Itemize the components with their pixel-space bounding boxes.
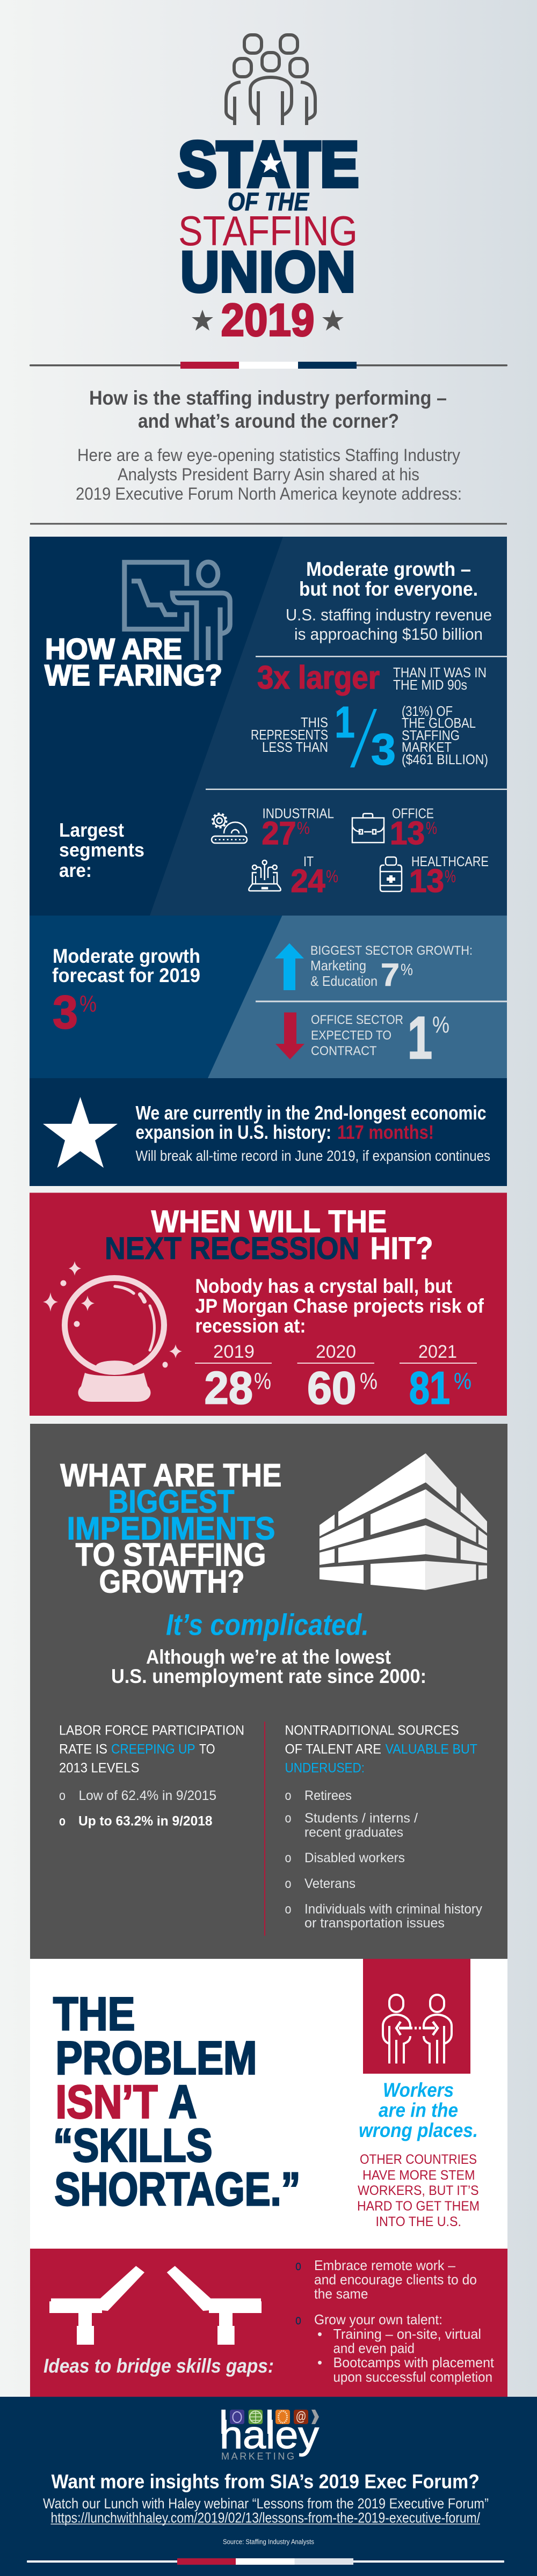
text: lowest unemployment: Although we’re at the lowest [146, 1646, 391, 1668]
text: lowest unemployment [111, 1646, 426, 1687]
text: webinar: Watch our Lunch with Haley webinar “Lessons from the 2019 Executive Forum” [43, 2496, 489, 2512]
list: talent sources: Disabled workers [304, 1850, 405, 1865]
list: ideas: Training – on-site, virtual [333, 2326, 481, 2342]
text: biggest sector growth [310, 943, 473, 993]
text: largest segments: are: [59, 859, 92, 881]
text: office sector contract: 1 [408, 1005, 432, 1071]
text: other countries [357, 2152, 480, 2229]
footer [0, 2397, 537, 2576]
text: crystal ball statement [195, 1275, 484, 1337]
heading: impediments: BIGGEST [108, 1483, 234, 1520]
stat: 2020 risk [297, 1342, 378, 1414]
stat: 2021 risk [400, 1342, 477, 1414]
text: office sector contract: EXPECTED TO [311, 1028, 391, 1043]
heading: how are we faring [45, 632, 222, 692]
stat: 3x larger: 3x larger [257, 660, 380, 696]
text: biggest sector growth: % [401, 960, 413, 979]
icon: right star [322, 310, 344, 331]
stat: 3x larger [257, 660, 487, 696]
list: ideas: the same [314, 2286, 368, 2302]
intro heading: How is the staffing industry performing – [89, 387, 447, 409]
panel: how are we faring [30, 537, 507, 916]
icon: gears and conveyor [212, 814, 247, 843]
panel: economic expansion [30, 1078, 507, 1186]
stat: 3x larger: THE MID 90s [393, 677, 467, 693]
icon: crystal ball [43, 1261, 182, 1402]
text: crystal ball statement: recession at: [195, 1315, 306, 1337]
text: biggest sector growth: & Education [310, 973, 378, 989]
column: nontraditional sources: OF TALENT ARE [285, 1742, 381, 1757]
text: moderate growth [299, 558, 478, 600]
stat: 3 percent: 3 [53, 986, 78, 1038]
intro paragraph: Here are a few eye-opening statistics Staffing Industry [77, 445, 460, 465]
text: other countries: OTHER COUNTRIES [360, 2152, 477, 2167]
callout box with icon [363, 1959, 470, 2074]
icon: laptop circuit [249, 860, 281, 891]
icon: briefcase [352, 814, 384, 843]
text: expansion headline: expansion in U.S. history: [135, 1121, 331, 1143]
text: forecast heading: Moderate growth [53, 945, 200, 967]
stat: 2020 risk: 60 [307, 1363, 357, 1414]
text: other countries: INTO THE U.S. [376, 2214, 461, 2229]
list: ideas: Bootcamps with placement [333, 2354, 495, 2370]
stat: one third: MARKET [402, 739, 452, 755]
stat: industrial: % [297, 818, 310, 838]
header: title block [178, 35, 359, 346]
intro heading: and what’s around the corner? [138, 410, 399, 432]
stat: 2021 risk: 2021 [418, 1342, 457, 1362]
column: labor force participation: CREEPING UP [111, 1742, 195, 1757]
text: industry revenue: is approaching $150 billion [294, 625, 483, 643]
heading: impediments: WHAT ARE THE [60, 1458, 281, 1493]
text: expansion headline: 117 months! [337, 1121, 434, 1143]
column: nontraditional sources [285, 1723, 482, 1931]
icon: down arrow [275, 1012, 304, 1059]
list: talent sources: Individuals with criminal history [304, 1902, 482, 1917]
stat: 2019 risk: 28 [204, 1363, 253, 1414]
intro paragraph: 2019 Executive Forum North America keynote address: [76, 484, 462, 503]
stat: healthcare [409, 853, 489, 899]
panel: growth forecast [30, 916, 507, 1078]
heading: how are we faring: WE FARING? [45, 658, 222, 692]
heading: the problem isn't a skills shortage: PROBLEM [56, 2032, 257, 2084]
list: ideas: o [295, 2311, 301, 2328]
intro text [76, 387, 462, 503]
stat: one third [251, 697, 488, 774]
icon: star in title [260, 152, 281, 173]
stat: healthcare: % [445, 867, 456, 886]
text: biggest sector growth: BIGGEST SECTOR GROWTH: [310, 943, 473, 958]
text: office sector contract: OFFICE SECTOR [311, 1013, 403, 1027]
text: other countries: HARD TO GET THEM [357, 2199, 480, 2214]
heading: recession: NEXT RECESSION [105, 1231, 360, 1266]
stat: one third: ($461 BILLION) [402, 751, 488, 767]
text: largest segments: segments [59, 839, 144, 861]
column: nontraditional sources: NONTRADITIONAL SOURCES [285, 1723, 459, 1738]
heading: the problem isn't a skills shortage [53, 1988, 301, 2215]
icon: left star [192, 310, 213, 331]
stat: IT: % [326, 867, 338, 886]
text: workers in wrong places [359, 2079, 478, 2141]
text: expansion headline [135, 1102, 487, 1143]
intro paragraph: Analysts President Barry Asin shared at his [118, 465, 419, 484]
stat: one third: 1 [335, 697, 355, 747]
icon: presenter with chart [125, 562, 230, 660]
text: workers in wrong places: are in the [379, 2099, 458, 2121]
icon: building [320, 1453, 487, 1590]
list: ideas: Embrace remote work – [314, 2257, 456, 2273]
text: moderate growth: Moderate growth – [306, 558, 471, 580]
list: talent sources: o [285, 1902, 291, 1917]
heading: the problem isn't a skills shortage: A [169, 2076, 197, 2128]
heading: the problem isn't a skills shortage: “SKILLS [53, 2120, 213, 2171]
text: biggest sector growth: Marketing [310, 957, 366, 974]
stat: 2021 risk: 81 [409, 1363, 450, 1414]
column: labor force participation: TO [199, 1742, 215, 1757]
list: participation rates: Low of 62.4% in 9/2015 [78, 1788, 216, 1803]
list: ideas: • [317, 2326, 322, 2342]
list: talent sources [285, 1788, 482, 1931]
icon: up arrow [275, 943, 304, 990]
column: nontraditional sources: UNDERUSED: [285, 1760, 365, 1775]
list: ideas: and encourage clients to do [314, 2271, 477, 2287]
list: ideas [295, 2257, 495, 2385]
list: talent sources: Students / interns / [304, 1811, 418, 1826]
stat: 2019 risk: % [254, 1368, 271, 1394]
list: talent sources: o [285, 1811, 291, 1826]
list: ideas: Grow your own talent: [314, 2311, 442, 2328]
heading: recession: HIT? [371, 1231, 433, 1266]
title: STAFFING: STAFFING [178, 207, 358, 254]
panel: ideas to bridge skills gaps [30, 2249, 507, 2397]
heading: impediments [60, 1458, 281, 1599]
column: labor force participation [59, 1723, 244, 1829]
list: ideas: upon successful completion [333, 2369, 492, 2385]
heading: the problem isn't a skills shortage: THE [53, 1988, 135, 2040]
heading: the problem isn't a skills shortage: SHORTAGE.” [55, 2163, 301, 2215]
text: workers in wrong places: Workers [383, 2079, 454, 2101]
text: industry revenue [286, 605, 492, 643]
stat: office [390, 805, 437, 851]
stat: one third: STAFFING [402, 727, 460, 743]
list: talent sources: or transportation issues [304, 1916, 445, 1931]
stat: industrial [262, 805, 334, 851]
list: participation rates: Up to 63.2% in 9/2018 [78, 1814, 213, 1829]
stat: 3 percent [53, 986, 97, 1038]
list: ideas: • [317, 2354, 322, 2370]
column: labor force participation: RATE IS [59, 1742, 107, 1757]
icon: medicine bottle [380, 857, 402, 891]
icon: bridge with gap [49, 2266, 262, 2345]
list: talent sources: o [285, 1876, 291, 1891]
title: 2019: 2019 [221, 295, 315, 346]
stat: one third: (31%) OF [402, 703, 453, 719]
stat: office: OFFICE [392, 805, 434, 821]
text: office sector contract: % [432, 1012, 449, 1038]
list: participation rates [59, 1788, 216, 1829]
stat: 3 percent: % [79, 991, 97, 1017]
stat: one third: REPRESENTS [251, 727, 328, 743]
stat: 2019 risk [195, 1342, 272, 1414]
heading: recession: WHEN WILL THE [151, 1204, 387, 1239]
list: ideas: o [295, 2257, 301, 2273]
panel: biggest impediments [30, 1424, 507, 1959]
heading: want more insights: Want more insights from SIA’s 2019 Exec Forum? [52, 2471, 480, 2492]
text: source: Source: Staffing Industry Analysts [223, 2537, 314, 2546]
stat: IT: IT [303, 853, 314, 869]
title: STATE: STATE [178, 129, 359, 200]
panel: skills shortage [30, 1959, 507, 2249]
title: OF THE: OF THE [228, 187, 309, 216]
text: industry revenue: U.S. staffing industry revenue [286, 605, 492, 624]
stat: office: % [426, 818, 437, 838]
heading: impediments: TO STAFFING [75, 1537, 266, 1572]
intro paragraph [76, 445, 462, 503]
list: talent sources: o [285, 1788, 291, 1803]
text: other countries: WORKERS, BUT IT’S [358, 2183, 479, 2198]
stat: industrial: INDUSTRIAL [262, 805, 334, 821]
stat: office: 13 [390, 815, 425, 851]
logo: haley marketing: haley [220, 2414, 319, 2457]
list: participation rates: o [59, 1814, 66, 1829]
stat: one third: LESS THAN [262, 739, 328, 755]
text: other countries: HAVE MORE STEM [362, 2168, 475, 2183]
list: talent sources: Veterans [304, 1876, 355, 1891]
stat: 2020 risk: % [360, 1368, 378, 1394]
list: participation rates: o [59, 1788, 66, 1803]
text: ideas heading: Ideas to bridge skills gaps: [43, 2355, 274, 2377]
stat: IT: 24 [291, 863, 325, 899]
intro heading [89, 387, 447, 432]
heading: the problem isn't a skills shortage: ISN’T [56, 2076, 158, 2128]
list: talent sources: Retirees [304, 1788, 352, 1803]
column: labor force participation: LABOR FORCE PARTICIPATION [59, 1723, 244, 1738]
stat: one third: THE GLOBAL [402, 715, 476, 731]
logo: haley marketing: @ [296, 2409, 306, 2424]
column: nontraditional sources: VALUABLE BUT [386, 1742, 477, 1757]
stat: one third: 3 [371, 724, 396, 774]
stat: 2021 risk: % [454, 1368, 471, 1394]
text: crystal ball statement: Nobody has a crystal ball, but [195, 1275, 452, 1297]
text: office sector contract: CONTRACT [311, 1044, 377, 1058]
stat: healthcare: HEALTHCARE [411, 853, 489, 869]
text: it's complicated: It’s complicated. [166, 1608, 369, 1641]
title: UNION: UNION [180, 239, 355, 304]
icon: star [43, 1097, 118, 1168]
text: lowest unemployment: U.S. unemployment rate since 2000: [111, 1665, 426, 1687]
panel: when will the next recession hit [30, 1192, 507, 1416]
stat: 2019 risk: 2019 [213, 1342, 255, 1362]
stat: IT [291, 853, 338, 899]
text: forecast heading [52, 945, 200, 986]
text: biggest sector growth: 7 [381, 957, 400, 993]
stat: 3x larger: THAN IT WAS IN [393, 664, 487, 680]
column: labor force participation: 2013 LEVELS [59, 1760, 140, 1775]
text: forecast heading: forecast for 2019 [52, 964, 200, 986]
heading: impediments: GROWTH? [99, 1564, 245, 1599]
text: largest segments: Largest [59, 819, 124, 841]
stat: 2020 risk: 2020 [316, 1342, 356, 1362]
list: talent sources: o [285, 1850, 291, 1865]
text: office sector contract [311, 1005, 449, 1071]
heading: impediments: IMPEDIMENTS [67, 1510, 275, 1547]
stat: healthcare: 13 [409, 863, 444, 899]
icon: group of people [226, 35, 315, 125]
icon: two workers apart [383, 1995, 452, 2063]
text: workers in wrong places: wrong places. [359, 2119, 478, 2141]
list: talent sources: recent graduates [304, 1825, 403, 1840]
logo: haley marketing: MARKETING [221, 2451, 294, 2462]
text: moderate growth: but not for everyone. [299, 578, 478, 600]
text: crystal ball statement: JP Morgan Chase projects risk of [195, 1295, 484, 1317]
list: ideas: and even paid [333, 2340, 415, 2356]
stat: industrial: 27 [262, 815, 296, 851]
stat: one third: THIS [301, 714, 328, 730]
text: largest segments [59, 819, 144, 881]
text: expansion note: Will break all-time record in June 2019, if expansion continues [135, 1147, 490, 1164]
heading: recession [105, 1204, 433, 1266]
heading: how are we faring: HOW ARE [45, 632, 182, 665]
